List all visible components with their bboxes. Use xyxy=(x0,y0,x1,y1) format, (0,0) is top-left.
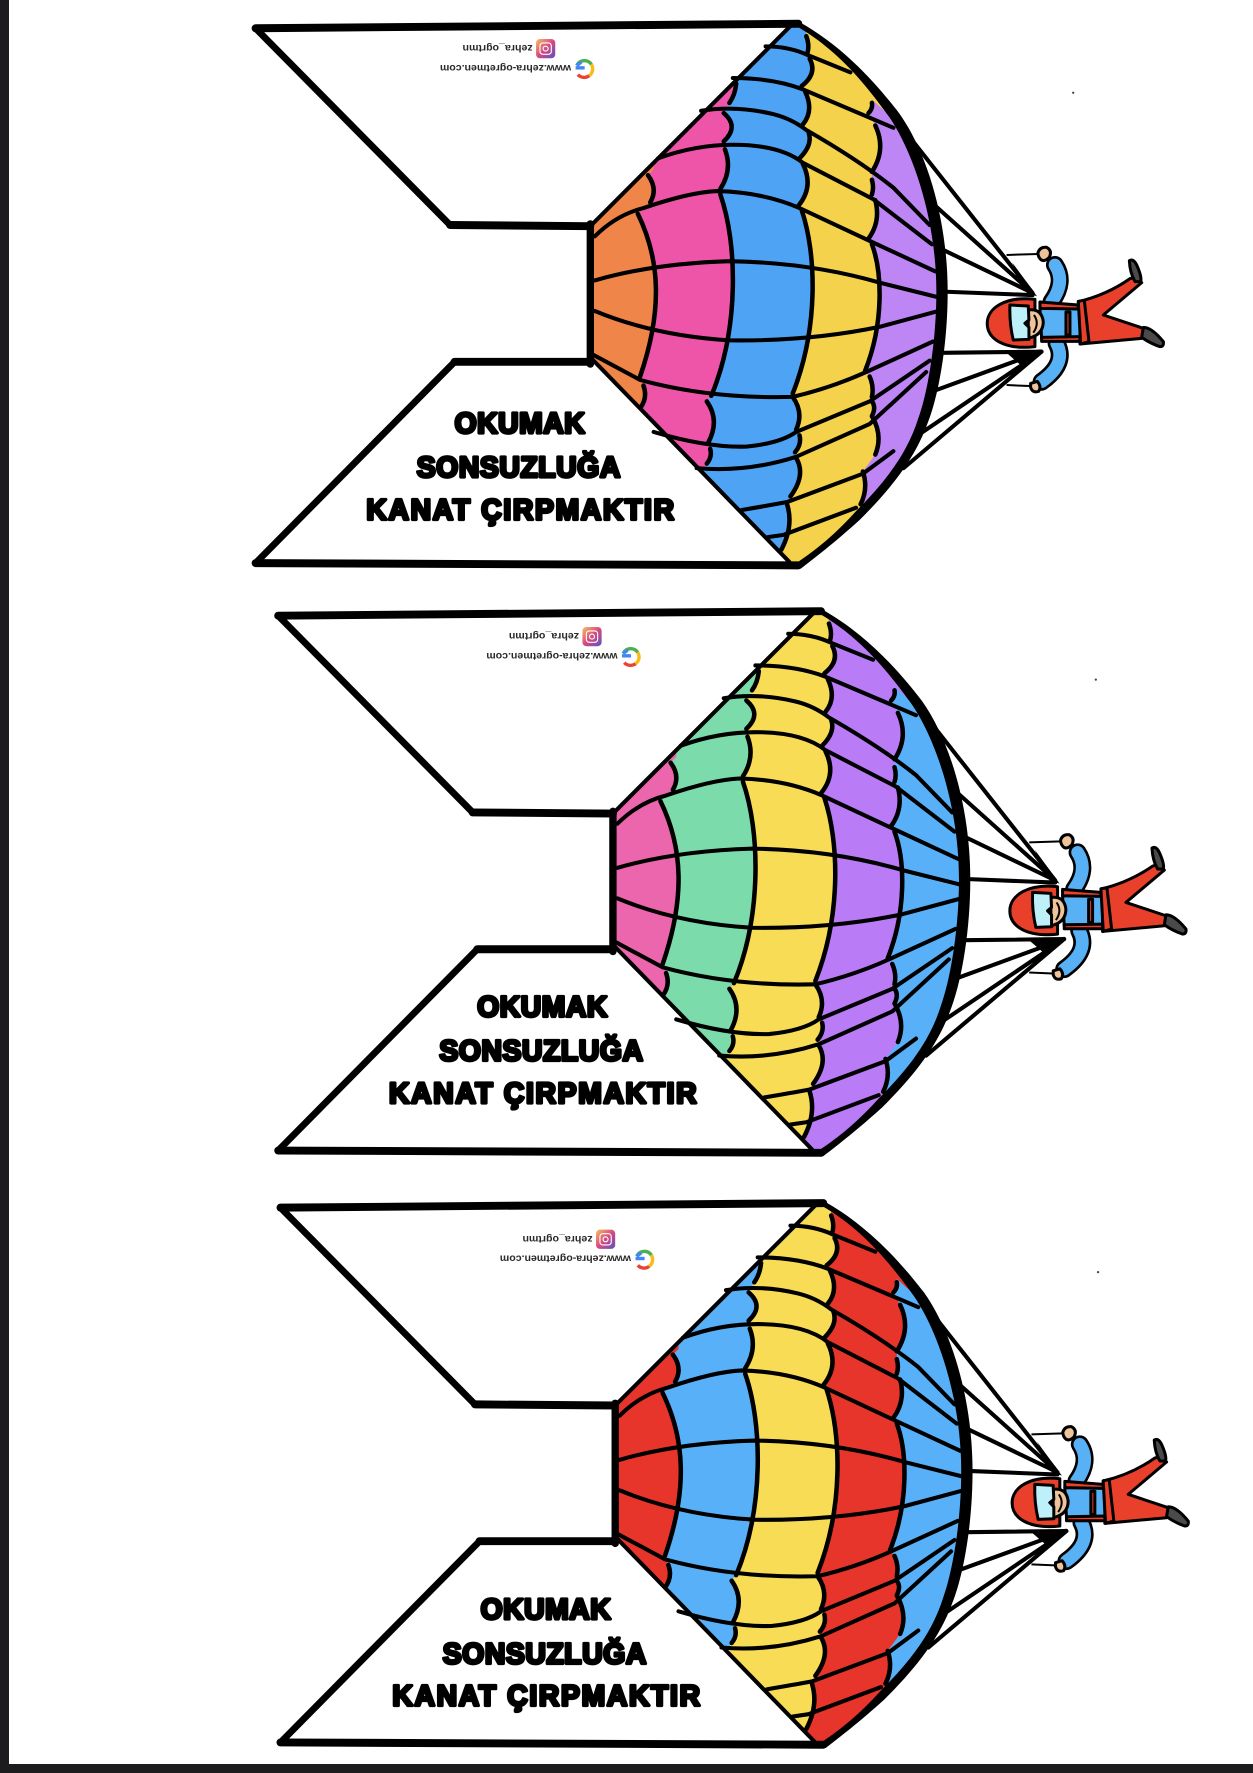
heading: SONSUZLUĞA xyxy=(417,451,620,483)
watermark: zehra_ogrtmn xyxy=(463,42,533,53)
watermark: zehra_ogrtmn xyxy=(522,1233,593,1244)
balloon 1 xyxy=(256,0,1163,588)
heading: KANAT ÇIRPMAKTIR xyxy=(392,1680,700,1712)
heading: SONSUZLUĞA xyxy=(439,1035,643,1067)
heading xyxy=(389,991,697,1109)
panel: parachute with wing panels xyxy=(278,587,995,1175)
heading: OKUMAK xyxy=(477,991,608,1023)
heading: KANAT ÇIRPMAKTIR xyxy=(366,494,674,526)
heading: KANAT ÇIRPMAKTIR xyxy=(389,1077,697,1109)
watermark: zehra_ogrtmn xyxy=(509,630,579,641)
balloon 3 xyxy=(280,1179,1188,1767)
watermark xyxy=(486,627,639,665)
skydiver and risers xyxy=(928,1317,1188,1647)
heading: OKUMAK xyxy=(481,1593,611,1625)
heading: OKUMAK xyxy=(455,407,585,439)
heading xyxy=(392,1593,700,1712)
watermark xyxy=(500,1230,653,1268)
balloon 2 xyxy=(278,587,1186,1175)
panel: parachute with wing panels xyxy=(256,0,973,588)
skydiver and risers xyxy=(926,725,1186,1056)
panel: parachute with wing panels xyxy=(280,1179,997,1767)
watermark: www.zehra-ogretmen.com xyxy=(500,1253,632,1264)
heading xyxy=(366,407,674,526)
heading: SONSUZLUĞA xyxy=(443,1637,646,1669)
watermark: www.zehra-ogretmen.com xyxy=(486,650,618,661)
watermark: www.zehra-ogretmen.com xyxy=(440,62,572,73)
watermark xyxy=(440,39,593,77)
skydiver and risers xyxy=(904,138,1163,468)
